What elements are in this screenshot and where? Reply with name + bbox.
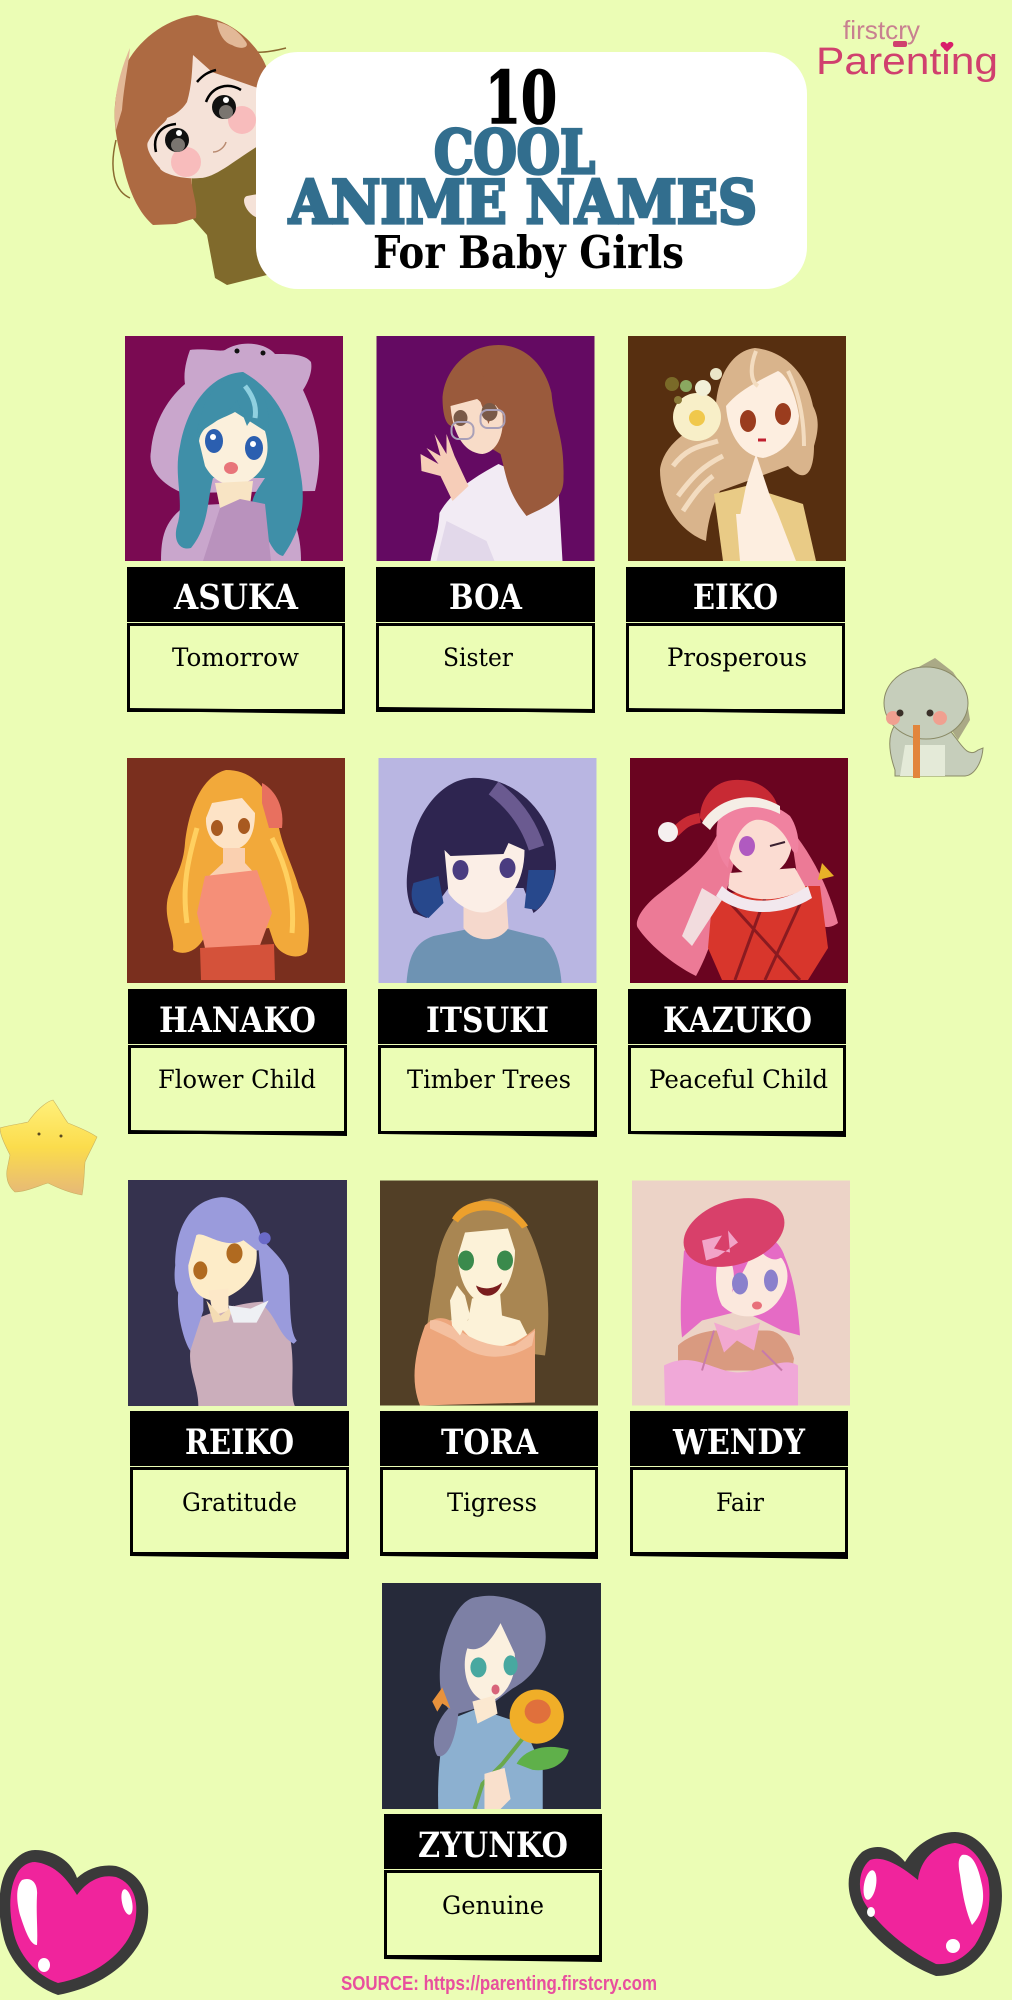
meaning box: Tigress: Tigress [447,1488,537,1517]
name bar: TORA: TORA [441,1422,539,1463]
meaning box: Fair [630,1468,848,1559]
name bar: EIKO [626,567,845,622]
meaning box: Flower Child [128,1046,347,1136]
name bar: KAZUKO: KAZUKO [663,1000,812,1041]
meaning box: Sister [376,624,595,713]
meaning box: Peaceful Child: Peaceful Child [649,1065,828,1094]
name bar: ZYUNKO: ZYUNKO [418,1825,568,1866]
portrait: REIKO [128,1180,347,1406]
name bar: REIKO [130,1411,349,1466]
portrait: ASUKA [125,336,343,561]
logo: FirstCry Parenting: firstcry [843,15,920,45]
logo: FirstCry Parenting [816,15,998,83]
icon: grey dinosaur [884,658,983,778]
card: HANAKO [127,758,347,1136]
portrait: KAZUKO [630,758,848,983]
meaning box: Genuine: Genuine [442,1891,544,1920]
meaning box: Sister: Sister [443,643,513,672]
icon: heart left [0,1850,148,1995]
meaning box: Gratitude: Gratitude [182,1488,297,1517]
meaning box: Genuine [384,1872,602,1962]
name bar: HANAKO: HANAKO [159,1000,316,1041]
meaning box: Peaceful Child [628,1046,846,1137]
meaning box: Fair: Fair [716,1488,764,1517]
meaning box: Prosperous: Prosperous [667,643,807,672]
meaning box: Prosperous [626,624,845,714]
card: ITSUKI [378,758,597,1137]
card: KAZUKO [628,758,848,1137]
title card [256,52,807,289]
name bar: HANAKO [128,989,347,1044]
icon: yellow star [0,1100,97,1195]
card: EIKO [626,336,846,714]
meaning box: Tigress [380,1468,598,1559]
meaning box: Gratitude [130,1468,349,1559]
name bar: ITSUKI: ITSUKI [426,1000,549,1041]
portrait: WENDY [632,1180,850,1406]
portrait: EIKO [628,336,846,561]
name bar: WENDY [630,1411,848,1466]
name bar: ITSUKI [378,989,597,1044]
name bar: BOA [376,567,595,622]
card: BOA [376,336,595,713]
portrait: BOA [376,336,594,561]
name bar: WENDY: WENDY [672,1422,806,1463]
logo: FirstCry Parenting: Parenting [816,41,998,83]
name bar: ASUKA [127,567,345,622]
card: ASUKA [125,336,345,714]
name bar: ZYUNKO [384,1814,602,1869]
name bar: KAZUKO [628,989,846,1044]
name bar: REIKO: REIKO [185,1422,294,1463]
meaning box: Timber Trees [378,1046,597,1137]
card: TORA [380,1180,598,1559]
source line: SOURCE: https://parenting.firstcry.com [341,1973,657,1995]
portrait: ITSUKI [378,758,596,983]
title: ANIME NAMES: ANIME NAMES [288,168,757,238]
title: COOL: COOL [434,118,595,188]
card: REIKO [128,1180,349,1559]
mascot: brown-haired girl peeking [113,15,286,285]
name bar: BOA: BOA [449,577,523,618]
name bar: TORA [380,1411,598,1466]
name bar: ASUKA: ASUKA [173,577,299,618]
card: WENDY [630,1180,850,1559]
meaning box: Tomorrow: Tomorrow [172,643,300,672]
name bar: EIKO: EIKO [693,577,778,618]
title: 10: 10 [485,55,557,140]
icon: heart right [849,1832,1002,1976]
portrait: ZYUNKO [382,1583,601,1809]
portrait: TORA [380,1180,598,1406]
meaning box: Flower Child: Flower Child [158,1065,316,1094]
portrait: HANAKO [127,758,345,983]
card: ZYUNKO [382,1583,602,1962]
subtitle: For Baby Girls: For Baby Girls [373,226,684,279]
meaning box: Timber Trees: Timber Trees [407,1065,571,1094]
meaning box: Tomorrow [127,624,345,714]
